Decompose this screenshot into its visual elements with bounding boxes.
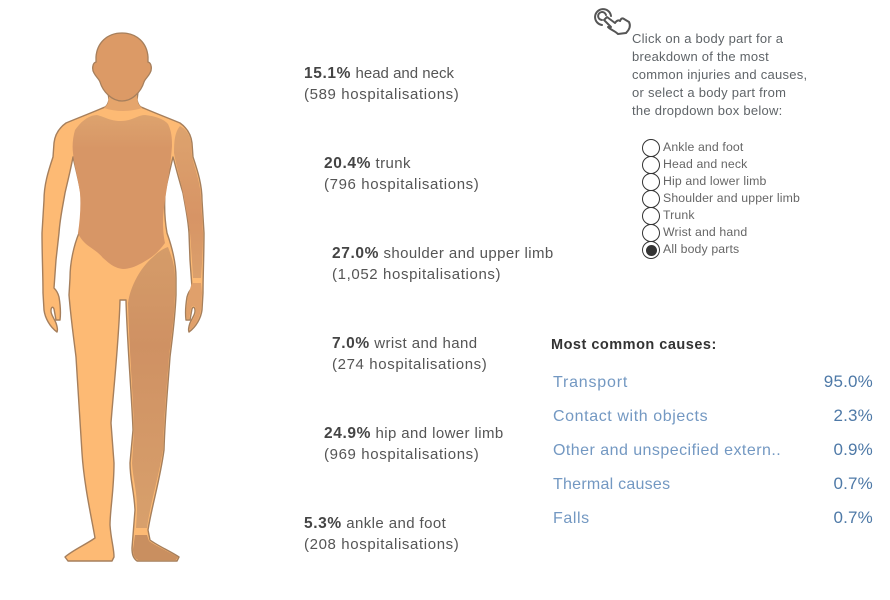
row: transport <box>553 372 873 391</box>
row: contact with objects: 2.3% <box>833 406 873 425</box>
stat: trunk: 20.4% trunk <box>324 155 411 172</box>
region: shoulder and upper limb <box>174 126 203 278</box>
instruction text: or select a body part from <box>632 85 786 100</box>
option: hip and lower limb: Hip and lower limb <box>663 174 766 188</box>
instruction text <box>632 31 807 118</box>
option: all body parts <box>642 242 739 259</box>
region: neck <box>104 96 142 111</box>
row: contact with objects: Contact with objects <box>553 408 708 425</box>
option: trunk: Trunk <box>663 208 695 222</box>
instruction text: the dropdown box below: <box>632 103 783 118</box>
icon: pointing hand <box>594 8 631 35</box>
region: trunk <box>73 115 172 269</box>
row: other and unspecified: Other and unspecified extern.. <box>553 442 781 459</box>
stat: shoulder and upper limb: (1,052 hospitalisations) <box>332 266 501 283</box>
stat: trunk: (796 hospitalisations) <box>324 176 479 193</box>
row: falls: 0.7% <box>833 508 873 527</box>
option: hip and lower limb <box>642 174 766 190</box>
stat: shoulder and upper limb: 27.0% shoulder and upper limb <box>332 245 554 262</box>
stat: head and neck: 15.1% head and neck <box>304 65 454 82</box>
causes table <box>553 372 873 527</box>
row: contact with objects <box>553 406 873 425</box>
row: transport: 95.0% <box>824 372 873 391</box>
row: falls: Falls <box>553 510 590 527</box>
row: thermal causes: 0.7% <box>833 474 873 493</box>
stat: head and neck <box>304 65 459 103</box>
option: shoulder and upper limb: Shoulder and upper limb <box>663 191 800 205</box>
body silhouette <box>42 92 204 561</box>
option: trunk <box>642 208 695 224</box>
row: other and unspecified: 0.9% <box>833 440 873 459</box>
option: head and neck <box>642 156 748 174</box>
row: transport: Transport <box>553 374 628 391</box>
stat: wrist and hand: 7.0% wrist and hand <box>332 335 477 352</box>
stat: shoulder and upper limb <box>332 245 554 283</box>
row: thermal causes: Thermal causes <box>553 476 670 493</box>
instruction text: breakdown of the most <box>632 49 769 64</box>
stat: hip and lower limb <box>324 425 504 463</box>
stat: wrist and hand <box>332 335 487 373</box>
body part selector <box>642 139 800 259</box>
stat: ankle and foot: (208 hospitalisations) <box>304 536 459 553</box>
option: ankle and foot: Ankle and foot <box>663 140 743 154</box>
row: other and unspecified <box>553 440 873 459</box>
stat: wrist and hand: (274 hospitalisations) <box>332 356 487 373</box>
row: thermal causes <box>553 474 873 493</box>
instruction text: common injuries and causes, <box>632 67 807 82</box>
body diagram <box>41 32 205 562</box>
option: head and neck: Head and neck <box>663 157 747 171</box>
option: ankle and foot <box>642 139 744 156</box>
option: wrist and hand <box>642 224 747 242</box>
row: falls <box>553 508 873 527</box>
heading: most common causes: Most common causes: <box>551 337 717 353</box>
stat: ankle and foot: 5.3% ankle and foot <box>304 515 446 532</box>
option: wrist and hand: Wrist and hand <box>663 225 747 239</box>
stat: hip and lower limb: (969 hospitalisations) <box>324 446 479 463</box>
region: ankle and foot <box>133 535 178 560</box>
instruction text: Click on a body part for a <box>632 31 783 46</box>
stat: ankle and foot <box>304 515 459 553</box>
stat: hip and lower limb: 24.9% hip and lower limb <box>324 425 504 442</box>
stat: trunk <box>324 155 479 193</box>
region: hip and lower limb <box>128 247 175 528</box>
option: all body parts: All body parts <box>663 242 739 256</box>
region: head and neck <box>93 33 151 101</box>
region: wrist and hand <box>187 283 202 330</box>
stat: head and neck: (589 hospitalisations) <box>304 86 459 103</box>
